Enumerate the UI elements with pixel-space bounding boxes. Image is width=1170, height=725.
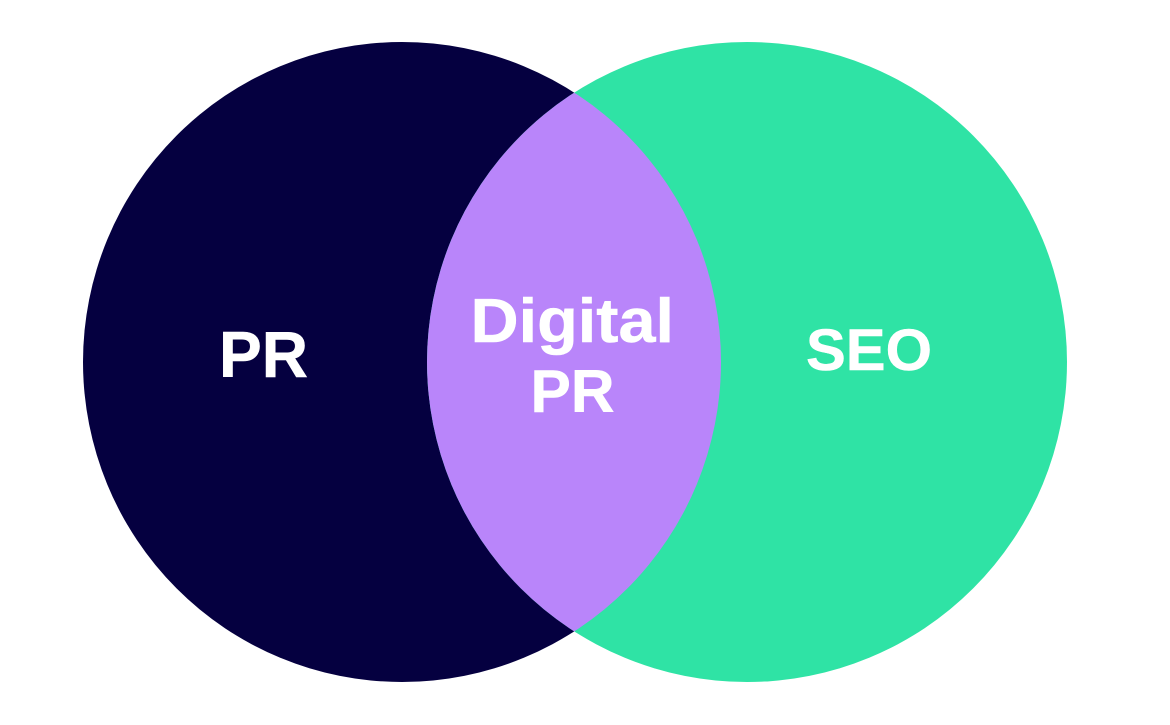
overlap: Digital PR xyxy=(427,92,721,632)
label: SEO: SEO xyxy=(806,318,932,383)
circle: SEO xyxy=(427,42,1067,682)
venn diagram xyxy=(83,42,1067,682)
label: Digital PR: PR xyxy=(530,358,614,425)
label: Digital PR xyxy=(470,287,674,425)
label: Digital PR: Digital xyxy=(470,287,674,356)
label: PR: PR xyxy=(219,318,308,391)
circle: PR xyxy=(83,42,721,682)
